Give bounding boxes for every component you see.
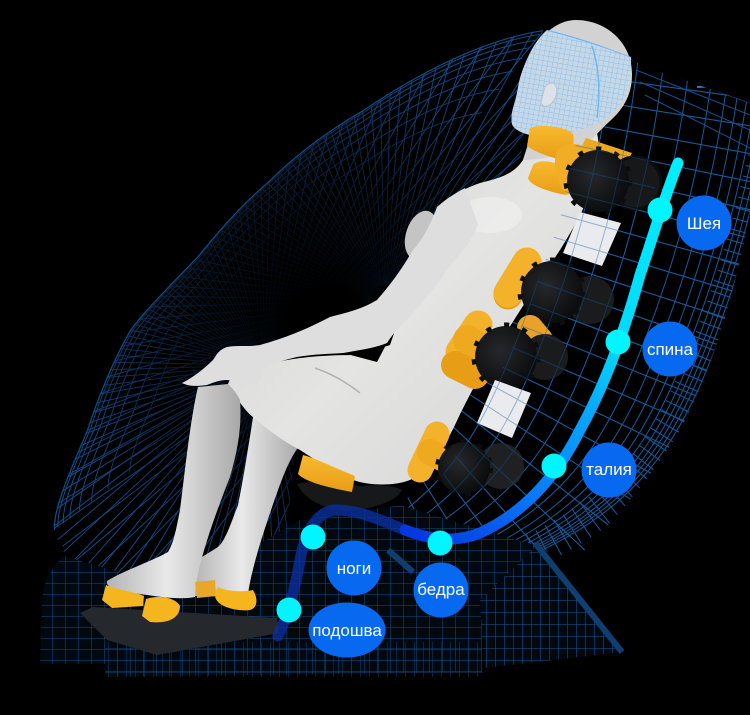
label: back: спина (647, 340, 694, 359)
lines along the back (280, 60, 530, 552)
waist massage roller (420, 434, 524, 494)
label: waist: талия (586, 460, 632, 479)
chair shell: left wireframe (54, 30, 543, 572)
label: thighs: бедра (417, 580, 465, 599)
black head (567, 150, 629, 212)
figure (107, 20, 640, 598)
chair base wireframe (40, 505, 622, 677)
label: soles (308, 602, 386, 658)
back massage roller lower (455, 325, 568, 388)
foot massage rollers (102, 580, 256, 622)
torso and thigh (228, 126, 599, 485)
label: back (642, 322, 698, 376)
foot plate (80, 607, 279, 655)
head (512, 20, 632, 160)
far orange node (580, 138, 632, 165)
black gap under arm (343, 343, 387, 362)
label: waist (582, 442, 636, 498)
torso highlight (458, 197, 522, 233)
far black head (609, 157, 661, 209)
orange nodes (527, 126, 574, 160)
label: thighs (414, 562, 468, 618)
cross lines (410, 60, 660, 552)
near leg (107, 384, 241, 598)
arm (182, 188, 478, 386)
thigh crease (315, 368, 360, 393)
right wedge (480, 546, 622, 668)
top band lines (632, 60, 750, 148)
label: legs: ноги (337, 559, 371, 578)
white support pad upper (563, 212, 621, 266)
track marker dots (276, 198, 672, 622)
concentric mesh arcs (58, 34, 540, 527)
breast (399, 207, 443, 263)
far leg (194, 417, 300, 596)
mesh over the rollers (430, 135, 664, 495)
radial mesh fans (155, 70, 615, 530)
label: legs (326, 540, 382, 596)
chair shell: right back wireframe (408, 60, 750, 556)
white support pad lower (477, 380, 531, 438)
back massage roller upper (508, 261, 614, 324)
neck massage roller (527, 126, 661, 212)
head wireframe (512, 30, 632, 134)
orange knobs (508, 264, 545, 295)
label: soles: подошва (312, 621, 382, 640)
label: neck (676, 196, 732, 250)
left base block (40, 505, 536, 677)
label: neck: Шея (687, 214, 721, 233)
seat massage roller (297, 455, 402, 511)
massage track line (278, 163, 678, 636)
